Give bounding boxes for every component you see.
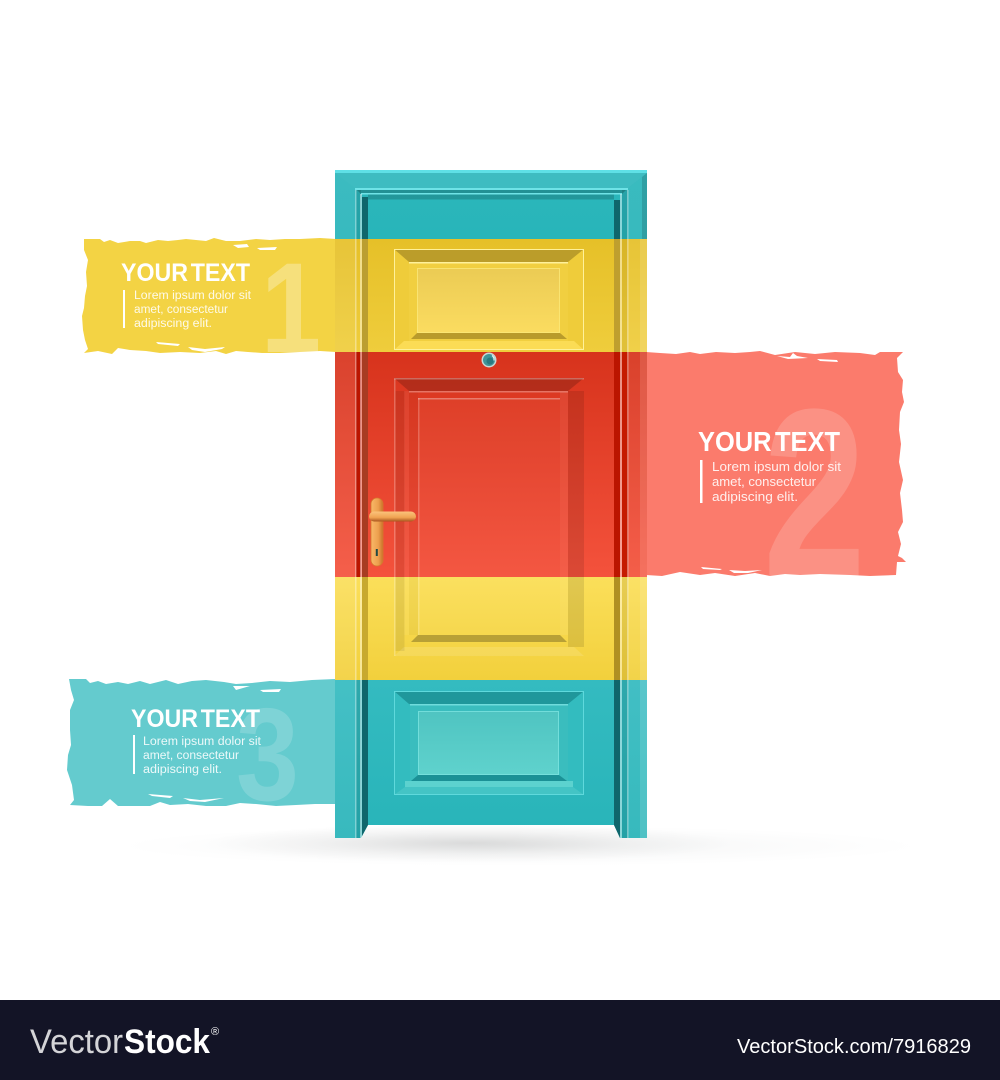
body text 1: adipiscing elit. (134, 318, 212, 330)
heading 3: YOUR TEXT (131, 705, 260, 733)
icon: door handle (369, 498, 416, 566)
body text 2: adipiscing elit. (712, 490, 798, 504)
body text 3: Lorem ipsum dolor sit (143, 736, 262, 748)
accent bar 3 (133, 735, 135, 774)
body text 1 (134, 290, 252, 330)
number 2: 2 (763, 359, 866, 627)
number 1: 1 (261, 237, 321, 380)
footer logo: Vector (30, 1023, 123, 1061)
accent bar 1 (123, 290, 125, 328)
number 3: 3 (236, 681, 299, 828)
panel: banner 3 teal (67, 679, 336, 828)
bottom panel (394, 691, 584, 795)
body text 3: amet, consectetur (143, 750, 239, 762)
door frame (335, 170, 647, 838)
colour bands (335, 170, 647, 838)
body text 2: amet, consectetur (712, 475, 816, 489)
right shadow column (614, 200, 620, 838)
door (335, 170, 647, 838)
left shadow column (362, 197, 368, 836)
torn banner shape 3 (67, 679, 336, 806)
inner frame channels (356, 190, 628, 838)
body text 3 (143, 736, 262, 776)
icon: door peephole (482, 352, 496, 368)
footer url: VectorStock.com/7916829 (737, 1036, 971, 1058)
accent bar 2 (700, 460, 702, 503)
main panel (394, 378, 584, 656)
floor shadow (120, 824, 920, 866)
panel: banner 1 yellow (82, 237, 336, 380)
torn scratches 2 (701, 353, 838, 573)
heading 1: YOUR TEXT (121, 259, 250, 287)
body text 2 (712, 460, 842, 504)
upper panel (394, 249, 584, 350)
body text 1: Lorem ipsum dolor sit (134, 290, 252, 302)
torn banner shape 2 (646, 351, 906, 576)
footer logo: Stock (124, 1023, 210, 1061)
heading 2: YOUR TEXT (698, 426, 840, 457)
body text 2: Lorem ipsum dolor sit (712, 460, 842, 474)
footer bar (0, 1000, 1000, 1080)
panel: banner 2 red (646, 351, 906, 627)
torn scratches 3 (148, 686, 281, 802)
torn scratches 1 (156, 244, 277, 352)
body text 1: amet, consectetur (134, 304, 228, 316)
body text 3: adipiscing elit. (143, 764, 222, 776)
registered mark: ® (211, 1026, 219, 1038)
footer logo (30, 1023, 210, 1061)
torn banner shape 1 (82, 238, 336, 354)
